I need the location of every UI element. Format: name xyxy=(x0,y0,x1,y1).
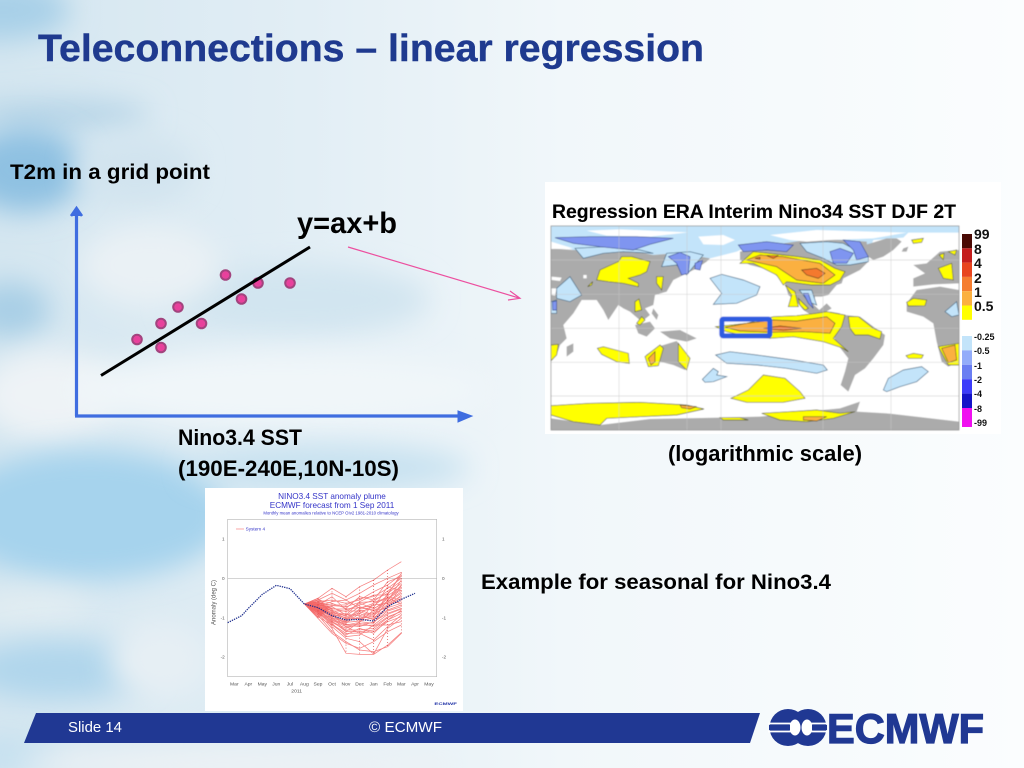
legend: System 4 xyxy=(246,527,265,532)
regression line xyxy=(101,247,310,376)
x axis months: Jan xyxy=(370,681,378,687)
colour bar: positive: 2 xyxy=(974,270,982,286)
warm anomalies: deep orange xyxy=(755,256,825,330)
x axis months xyxy=(230,681,434,695)
colour bar: positive: 99 xyxy=(974,226,990,242)
x axis months: Nov xyxy=(342,681,351,687)
x axis months: Jul xyxy=(287,681,293,687)
x axis months: Apr xyxy=(411,681,419,687)
pink arrow to map xyxy=(348,247,520,300)
colour bar: negative: -2 xyxy=(974,375,982,385)
y axis ticks: 0 xyxy=(222,576,225,581)
y axis ticks: -1 xyxy=(221,615,225,620)
y axis ticks: -1 xyxy=(442,615,446,620)
sea ice white xyxy=(551,229,907,296)
colour bar: positive xyxy=(962,226,994,320)
land xyxy=(551,238,959,430)
small ECMWF mark: ECMWF xyxy=(434,701,458,706)
colour bar: positive: 4 xyxy=(974,255,982,271)
x axis label: Nino3.4 SST xyxy=(178,425,303,450)
logo wordmark: ECMWF xyxy=(827,705,984,752)
x axis months: Apr xyxy=(244,681,253,687)
world map xyxy=(551,226,959,430)
arctic xyxy=(550,226,960,259)
forecast fan xyxy=(304,598,332,618)
logo symbol xyxy=(768,709,828,746)
x axis months: Jun xyxy=(272,681,281,687)
plume headings: NINO3.4 SST anomaly plume xyxy=(278,492,386,501)
legend xyxy=(236,527,265,532)
x axis months: Sep xyxy=(314,681,323,687)
x axis arrow xyxy=(75,411,472,422)
x axis months: Feb xyxy=(383,681,392,687)
map caption: (logarithmic scale) xyxy=(668,441,862,466)
x axis months: Mar xyxy=(397,681,406,687)
x axis label xyxy=(178,425,399,481)
ensemble mean and observed line xyxy=(228,585,415,623)
y axis ticks: 1 xyxy=(442,537,445,542)
cold anomalies xyxy=(551,242,959,392)
y axis label: T2m in a grid point xyxy=(10,161,210,184)
footer bar xyxy=(24,713,760,743)
regression equation: y=ax+b xyxy=(297,207,397,240)
colour bar: positive: 0.5 xyxy=(974,298,994,314)
y axis ticks: 1 xyxy=(222,537,225,542)
panel: regression map xyxy=(545,182,1001,434)
warm anomalies: orange xyxy=(648,255,957,421)
y axis title: Anomaly (deg C) xyxy=(212,580,218,625)
plume headings xyxy=(263,492,400,516)
grid lines xyxy=(551,226,959,430)
y axis ticks: -2 xyxy=(221,655,225,660)
x axis months: Oct xyxy=(328,681,336,687)
x axis months: Dec xyxy=(355,681,365,687)
copyright: © ECMWF xyxy=(369,719,442,736)
map heading: Regression ERA Interim Nino34 SST DJF 2T xyxy=(552,202,956,223)
colour bar: negative: -0.25 xyxy=(974,332,995,342)
y axis ticks: 0 xyxy=(442,576,445,581)
x axis months: Mar xyxy=(230,681,239,687)
colour bar: positive: 8 xyxy=(974,241,982,257)
colour bar: positive: 1 xyxy=(974,284,982,300)
warm anomalies: yellow xyxy=(551,238,959,425)
ECMWF logo xyxy=(768,705,984,752)
colour bar: negative: -8 xyxy=(974,404,982,414)
colour bar: negative: -99 xyxy=(974,418,987,428)
colour bar: negative: -1 xyxy=(974,361,982,371)
plume headings: Monthly mean anomalies relative to NCEP OIv2 1981-2010 climatology xyxy=(263,510,400,516)
plot frame xyxy=(228,519,437,677)
plume caption: Example for seasonal for Nino3.4 xyxy=(481,571,831,594)
y axis ticks xyxy=(221,537,446,660)
month marker columns xyxy=(318,570,401,654)
slide number: Slide 14 xyxy=(68,719,122,736)
x axis months: May xyxy=(258,681,268,687)
plume headings: ECMWF forecast from 1 Sep 2011 xyxy=(270,501,395,510)
forecast ensemble lines xyxy=(304,562,401,654)
colour bar: negative: -4 xyxy=(974,389,982,399)
x axis months: Aug xyxy=(300,681,309,687)
panel: NINO3.4 plume chart xyxy=(205,488,463,711)
colour bar: negative: -0.5 xyxy=(974,346,990,356)
scatter chart: linear regression sketch xyxy=(71,208,472,422)
colour bar: negative xyxy=(962,332,995,428)
data points xyxy=(132,270,295,352)
y axis ticks: -2 xyxy=(442,655,446,660)
title: Teleconnections – linear regression xyxy=(38,28,704,70)
x axis months: May xyxy=(424,681,434,687)
x axis label: (190E-240E,10N-10S) xyxy=(178,456,399,481)
y axis arrow xyxy=(71,208,82,416)
x axis months: 2011 xyxy=(291,689,302,695)
Nino3.4 box xyxy=(722,319,770,336)
